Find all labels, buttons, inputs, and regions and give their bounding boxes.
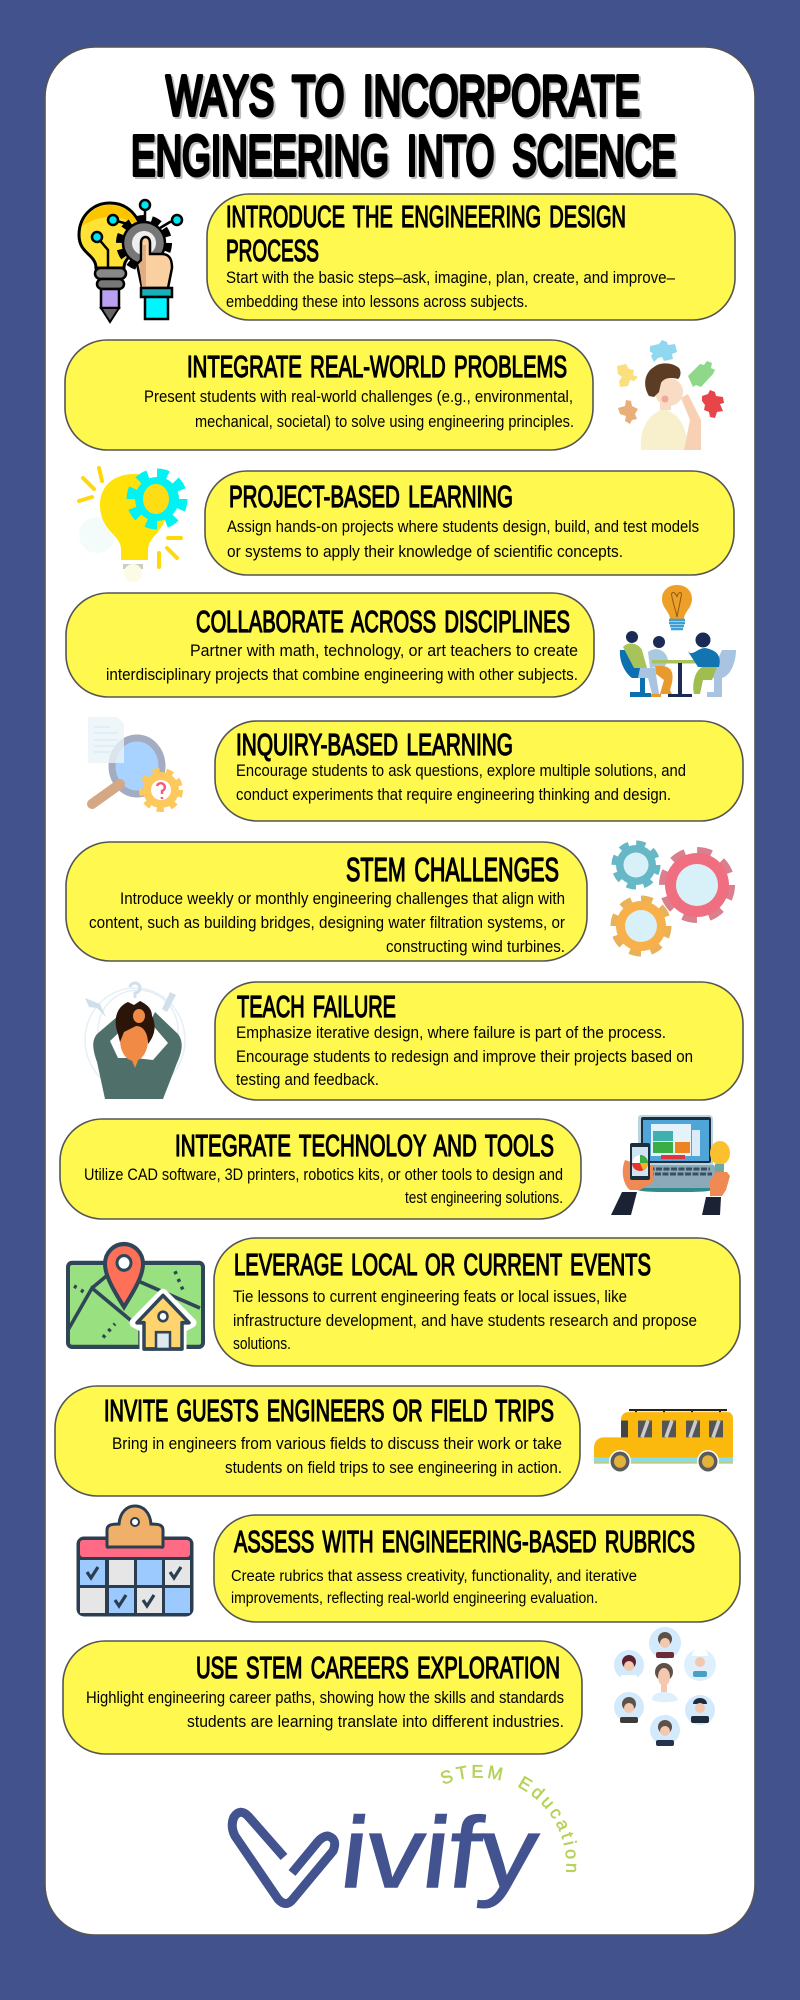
icon: magnifier, document and question gear: [88, 717, 180, 809]
card 5: inquiry-based learning: Encourage students to ask questions, explore multiple solutions, and: [236, 762, 686, 780]
card 2: integrate real-world problems: INTEGRATE REAL-WORLD PROBLEMS: [187, 350, 567, 384]
icon: bulb, gear and hand: [79, 200, 182, 322]
card 3: project-based learning: PROJECT-BASED LEARNING: [229, 480, 513, 514]
card 7: teach failure: Encourage students to redesign and improve their projects based on: [236, 1048, 693, 1066]
card 7: teach failure: TEACH FAILURE: [237, 990, 396, 1024]
card 3: project-based learning: [205, 471, 734, 575]
card 4: collaborate across disciplines: COLLABORATE ACROSS DISCIPLINES: [196, 605, 570, 639]
card 6: stem challenges: Introduce weekly or monthly engineering challenges that align with: [120, 890, 565, 908]
card 9: leverage local or current events: Tie lessons to current engineering feats or local issues, like: [233, 1288, 627, 1306]
card 8: integrate technology and tools: test engineering solutions.: [405, 1189, 563, 1207]
icon: lightbulb with cyan gear: [79, 468, 183, 582]
card 6: stem challenges: content, such as building bridges, designing water filtration systems, or: [89, 914, 565, 932]
logo: vivify stem education: [228, 1764, 578, 1909]
logo mark: [232, 1812, 335, 1904]
card 12: use stem careers exploration: [63, 1641, 582, 1754]
card 10: invite guest engineers or field trips: students on field trips to see engineering in action.: [225, 1459, 562, 1477]
card 4: collaborate across disciplines: [66, 593, 594, 697]
icon: team around a table with lightbulb: [620, 585, 736, 697]
card 5: inquiry-based learning: conduct experiments that require engineering thinking and design.: [236, 786, 671, 804]
card 3: project-based learning: Assign hands-on projects where students design, build, and test models: [227, 518, 699, 536]
card 10: invite guest engineers or field trips: INVITE GUESTS ENGINEERS OR FIELD TRIPS: [104, 1394, 554, 1428]
card 6: stem challenges: [66, 842, 587, 961]
logo wordmark: ivify: [335, 1797, 544, 1909]
card 11: assess with engineering-based rubrics: Create rubrics that assess creativity, functionality, and iterative: [231, 1568, 637, 1585]
icon: calendar with checkmarks: [78, 1506, 192, 1615]
icon: yellow school bus: [594, 1410, 733, 1473]
card 1: introduce the engineering design process: embedding these into lessons across subjects.: [226, 293, 528, 311]
card 10: invite guest engineers or field trips: Bring in engineers from various fields to discuss their work or take: [112, 1435, 562, 1453]
icon: stressed person holding head: [85, 983, 185, 1099]
card 7: teach failure: Emphasize iterative design, where failure is part of the process.: [236, 1024, 666, 1042]
card 8: integrate technology and tools: Utilize CAD software, 3D printers, robotics kits, or other tools to design and: [84, 1166, 563, 1184]
card 6: stem challenges: STEM CHALLENGES: [346, 851, 559, 888]
icon: boy thinking with puzzle pieces: [617, 340, 724, 450]
card 12: use stem careers exploration: students are learning translate into different industries.: [187, 1713, 564, 1731]
card 1: introduce the engineering design process: [207, 194, 735, 320]
card 12: use stem careers exploration: USE STEM CAREERS EXPLORATION: [196, 1651, 560, 1685]
icon: three colourful gears: [615, 844, 730, 952]
card 3: project-based learning: or systems to apply their knowledge of scientific concepts.: [227, 543, 623, 561]
card 5: inquiry-based learning: INQUIRY-BASED LEARNING: [236, 728, 513, 762]
card 9: leverage local or current events: infrastructure development, and have students research and propose: [233, 1312, 697, 1330]
icon: map with pin and house: [68, 1244, 203, 1350]
card 2: integrate real-world problems: mechanical, societal) to solve using engineering principles.: [195, 413, 574, 431]
card 8: integrate technology and tools: INTEGRATE TECHNOLOY AND TOOLS: [175, 1129, 554, 1163]
card 9: leverage local or current events: [214, 1238, 740, 1366]
card 4: collaborate across disciplines: Partner with math, technology, or art teachers to create: [190, 642, 578, 660]
card 7: teach failure: testing and feedback.: [236, 1071, 379, 1089]
card 1: introduce the engineering design process: Start with the basic steps–ask, imagine, plan, create, and improve–: [226, 269, 676, 287]
card 4: collaborate across disciplines: interdisciplinary projects that combine engineering with other subjects.: [106, 666, 578, 684]
card 1: introduce the engineering design process: PROCESS: [226, 234, 319, 268]
icon: circle of career people: [614, 1627, 716, 1746]
card 10: invite guest engineers or field trips: [55, 1386, 580, 1496]
card 11: assess with engineering-based rubrics: improvements, reflecting real-world engineering evaluation.: [231, 1590, 598, 1607]
card 7: teach failure: [215, 982, 743, 1100]
card 6: stem challenges: constructing wind turbines.: [386, 938, 565, 956]
card 8: integrate technology and tools: [60, 1119, 581, 1219]
icon: laptop, phone and hands: [611, 1115, 730, 1215]
card 2: integrate real-world problems: Present students with real-world challenges (e.g., environmental,: [144, 388, 573, 406]
logo tagline: STEM Education: [440, 1764, 578, 1872]
card 11: assess with engineering-based rubrics: [214, 1515, 740, 1622]
card 9: leverage local or current events: solutions.: [233, 1335, 291, 1353]
title: [131, 64, 676, 188]
card 2: integrate real-world problems: [65, 340, 593, 450]
card 12: use stem careers exploration: Highlight engineering career paths, showing how the skills and standards: [86, 1689, 564, 1707]
card 5: inquiry-based learning: [215, 721, 743, 821]
